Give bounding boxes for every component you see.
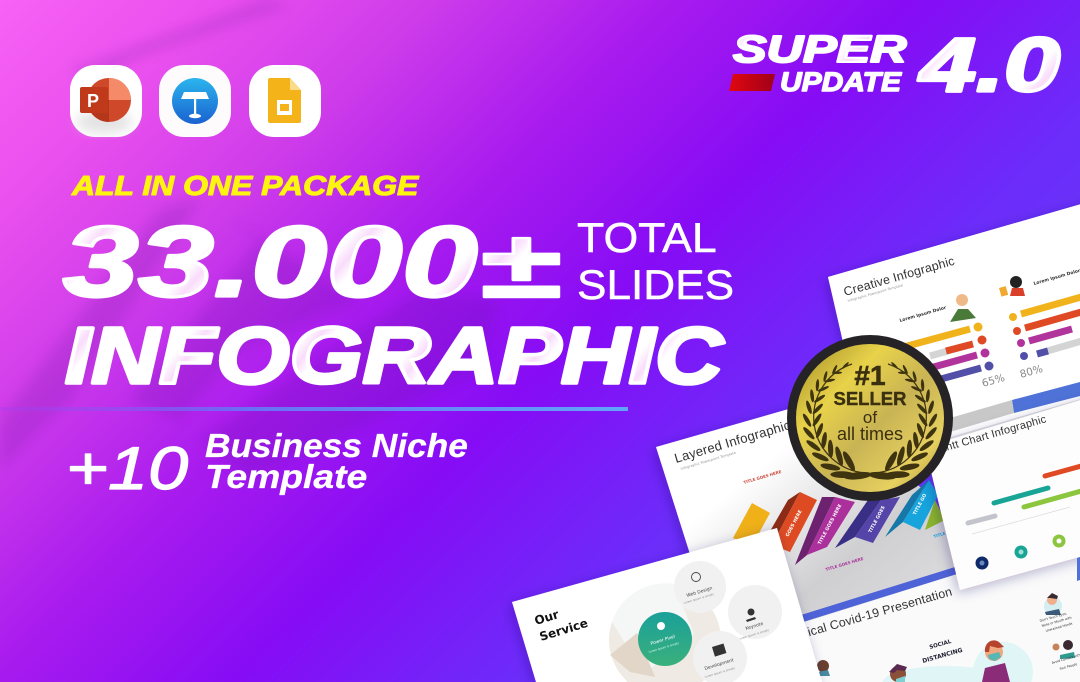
illustration: social distancing [883, 639, 1033, 682]
service: keynote: Keynote [745, 621, 764, 632]
brush texture bands [0, 0, 500, 480]
slide: Layered Infographic: TITLE [933, 531, 946, 539]
service title [533, 607, 590, 644]
slide: Gantt Chart Infographic [925, 385, 1080, 590]
icon: Google Slides [249, 65, 321, 137]
business niche count: +10 [66, 436, 188, 503]
slide: Medical Covid-19 Presentation [782, 520, 1080, 682]
slide: Layered Infographic: TITLE GOES HERE [825, 556, 864, 572]
slide: Our Service [512, 528, 822, 682]
laurel wreath [801, 361, 939, 487]
seller badge [787, 335, 953, 501]
divider rule [0, 407, 628, 411]
illustration: social distancing: DISTANCING [922, 647, 963, 665]
app icons row [70, 65, 321, 137]
service: web design: Lorem Ipsum is simply [683, 592, 715, 605]
bottom band [801, 567, 957, 622]
slide: Layered Infographic: GOES HERE [785, 509, 804, 538]
slide: Creative Infographic [828, 190, 1080, 480]
badge text: SELLER [834, 388, 906, 409]
service: power pixel: Power Pixel [650, 634, 676, 647]
slide: Layered Infographic: TITLE GOES HERE [743, 469, 782, 485]
infographic headline: INFOGRAPHIC [65, 312, 725, 400]
service: development: Lorem Ipsum is simply [704, 666, 736, 679]
slide: Layered Infographic [656, 400, 965, 655]
slide: Layered Infographic: TITLE GO [912, 493, 928, 516]
service: power pixel: Lorem Ipsum is simply [648, 641, 680, 654]
business niche count: Business Niche [205, 428, 468, 465]
person icons [817, 593, 1080, 676]
bottom band [1012, 382, 1080, 413]
progress bars right [1021, 296, 1080, 354]
headline number: 33.000 [63, 206, 477, 318]
icon: PowerPoint [70, 65, 142, 137]
icon: PowerPoint: P [87, 91, 99, 111]
service title: Service [538, 616, 590, 644]
progress bars left [900, 329, 981, 382]
milestone dots [976, 556, 988, 570]
slide: Gantt Chart Infographic: Gantt Chart Infographic [930, 413, 1048, 458]
person icons [956, 294, 968, 306]
illustration: social distancing: SOCIAL [929, 639, 953, 651]
total slides label [577, 215, 734, 309]
service: power pixel [638, 612, 692, 666]
slide: Medical Covid-19 Presentation: Medical Covid-19 Presentation [782, 584, 954, 646]
service: keynote [728, 585, 782, 641]
slide: Creative Infographic: 80% [1019, 363, 1044, 381]
super update badge [729, 22, 1060, 107]
service: keynote: Lorem Ipsum is simply [738, 628, 770, 641]
slide: Layered Infographic: Layered Infographic [673, 417, 792, 466]
gantt bars [968, 465, 1080, 523]
photo circle [609, 584, 721, 682]
super update badge: 4.0 [918, 22, 1060, 107]
icon: Keynote [159, 65, 231, 137]
person icons: Unwashed Hands [1045, 621, 1073, 633]
badge text: #1 [854, 360, 886, 391]
slide: Layered Infographic: TITLE GOES [867, 505, 887, 534]
total slides label: TOTAL [577, 215, 717, 262]
total slides label: SLIDES [577, 262, 734, 309]
slide: Creative Infographic: Infographic Powerpoint Template [847, 283, 904, 303]
slide: Creative Infographic: Lorem Ipsum Dolor [1033, 268, 1080, 287]
super update badge: SUPER [733, 29, 907, 71]
business niche count: Template [205, 459, 367, 495]
slide: Creative Infographic: Lorem Ipsum Dolor [899, 305, 948, 324]
service: web design [674, 561, 726, 613]
person icons: Nose or Mouth with [1041, 616, 1072, 628]
badge text: all times [837, 424, 903, 444]
slide: Creative Infographic: Creative Infographic [842, 254, 956, 299]
slide: Layered Infographic: TITLE GOES HERE [817, 503, 843, 546]
headline number: ± [481, 212, 562, 318]
business niche count [66, 428, 468, 503]
slide: Layered Infographic: Infographic Powerpoint Template [680, 451, 736, 471]
service: development: Development [704, 657, 735, 672]
badge text: of [863, 408, 877, 427]
service: development [693, 631, 747, 682]
ribbons [733, 503, 770, 546]
slide: Creative Infographic: 65% [981, 372, 1006, 390]
badge text [834, 360, 906, 444]
service: web design: Web Design [686, 585, 713, 599]
person icons: Sick People [1059, 662, 1078, 671]
service title: Our [533, 607, 561, 628]
super update badge: UPDATE [780, 67, 902, 98]
person icons: Don't Touch Eyes, [1039, 611, 1067, 623]
package tagline: ALL IN ONE PACKAGE [71, 171, 419, 202]
